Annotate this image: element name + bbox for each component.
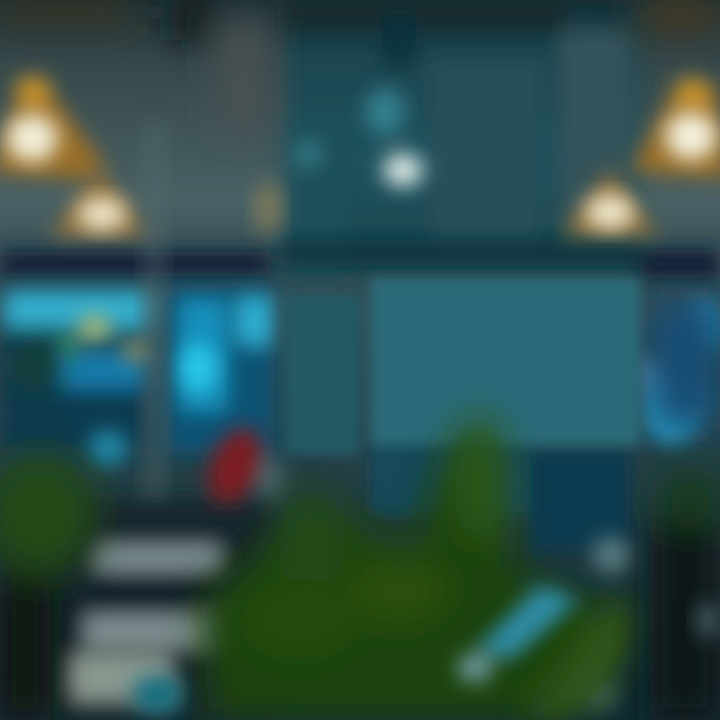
bright cyan highlights: [88, 299, 720, 466]
lamp: small centre left: [255, 182, 281, 234]
central teal panel: [285, 278, 640, 550]
dark lower right corner: [650, 470, 720, 720]
plant: centre: [200, 416, 630, 720]
blue floor highlight: [132, 537, 632, 715]
column: [143, 120, 165, 520]
plant: right leaf: [525, 600, 640, 720]
dark horizontal band: [0, 240, 720, 278]
central teal tower: [285, 0, 640, 280]
lamp: upper right: [630, 78, 720, 178]
lamp: lower left: [50, 170, 150, 236]
plant: left: [0, 347, 98, 720]
lower left blue window region: [0, 285, 275, 455]
small grey spot lower right: [696, 602, 720, 638]
lower right blue window: [650, 300, 720, 430]
floor lower left: [0, 500, 280, 720]
lamp: upper left: [0, 76, 105, 180]
red object: [198, 420, 284, 512]
central white lights: [294, 88, 423, 187]
ceiling shadows and warm top glow: [0, 0, 720, 130]
lamp: lower right: [560, 170, 658, 236]
yellow-green spot: [56, 315, 148, 361]
